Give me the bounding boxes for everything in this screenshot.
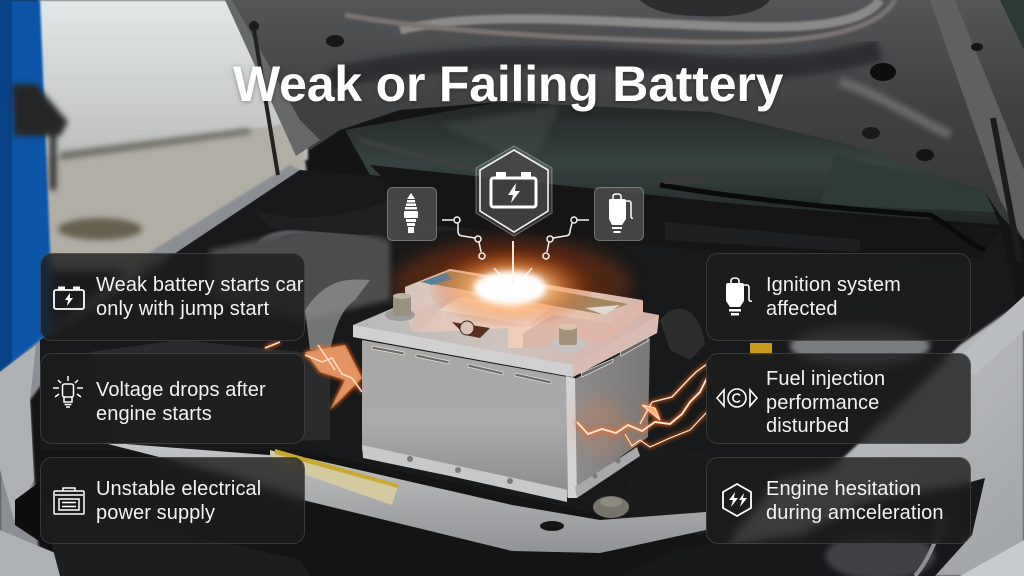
battery terminal: right bbox=[551, 324, 585, 352]
text: unstable electrical power supply bbox=[96, 478, 261, 524]
battery raised top bbox=[405, 269, 643, 348]
battery label bbox=[420, 271, 628, 314]
text: unstable electrical power supply: power supply bbox=[96, 502, 215, 524]
car body: left fender bbox=[0, 165, 320, 576]
text: engine hesitation during amceleration: during amceleration bbox=[766, 502, 944, 524]
text: ignition system affected bbox=[766, 274, 901, 320]
panel: ignition system bbox=[706, 253, 971, 341]
small tile: spark plug bbox=[388, 188, 436, 240]
right electric arcs bbox=[577, 364, 707, 447]
battery terminal: left bbox=[385, 293, 415, 321]
icon: ignition coil bbox=[609, 194, 633, 233]
right side orange heat tint bbox=[572, 397, 628, 453]
open hood underside bbox=[225, 0, 1024, 262]
text: weak battery starts car only with jump start: only with jump start bbox=[96, 298, 269, 320]
car body: right fender and headlight bbox=[620, 296, 1024, 576]
engine bay bbox=[40, 170, 1024, 540]
text: fuel injection performance disturbed bbox=[766, 368, 885, 437]
icon: battery with bolt bbox=[491, 172, 536, 207]
icon: fuel injector symbol bbox=[716, 388, 758, 408]
battery handle plate bbox=[440, 297, 547, 325]
hexagon battery badge bbox=[476, 146, 552, 236]
battery foot notches bbox=[407, 456, 620, 484]
panel: fuel injection bbox=[706, 353, 971, 444]
text: voltage drops after engine starts: engine starts bbox=[96, 402, 212, 424]
text: fuel injection performance disturbed: Fuel injection bbox=[766, 368, 885, 390]
battery bbox=[353, 240, 659, 502]
text: ignition system affected: affected bbox=[766, 298, 838, 320]
cowl and wipers bbox=[360, 140, 1000, 258]
battery base flange bbox=[362, 445, 567, 502]
panel: weak battery starts car bbox=[40, 253, 305, 341]
text: weak battery starts car only with jump start: Weak battery starts car bbox=[96, 274, 304, 296]
text: engine hesitation during amceleration bbox=[766, 478, 944, 524]
text: ignition system affected: Ignition system bbox=[766, 274, 901, 296]
connecting lines and nodes bbox=[442, 217, 589, 259]
icon: spark plug bbox=[404, 193, 418, 233]
text: voltage drops after engine starts bbox=[96, 379, 266, 424]
text: fuel injection performance disturbed: disturbed bbox=[766, 415, 849, 437]
car body: radiator support bar bbox=[40, 442, 706, 576]
panel: voltage drops bbox=[40, 353, 305, 444]
top glow burst on battery bbox=[427, 241, 597, 328]
panel: unstable electrical bbox=[40, 457, 305, 544]
windscreen bbox=[345, 102, 1000, 225]
icon: hexagon with sparks bbox=[722, 483, 752, 517]
title: Weak or Failing Battery bbox=[233, 56, 783, 112]
battery glow halo bbox=[392, 240, 632, 330]
battery lid bbox=[353, 269, 659, 377]
icon: battery box bbox=[53, 487, 85, 515]
left spark lightning bbox=[265, 342, 362, 410]
small tile: ignition coil bbox=[594, 188, 644, 240]
text: fuel injection performance disturbed: performance bbox=[766, 392, 879, 414]
battery front face bbox=[362, 340, 573, 498]
panel: engine hesitation bbox=[706, 457, 971, 544]
garage wall and floor bbox=[0, 0, 320, 380]
icon: ignition coil bbox=[726, 277, 752, 316]
text: engine hesitation during amceleration: Engine hesitation bbox=[766, 478, 921, 500]
icon: battery bbox=[53, 286, 85, 310]
battery vents bbox=[372, 337, 648, 384]
battery right face bbox=[573, 338, 650, 490]
icon: bulb bbox=[53, 376, 83, 408]
text: weak battery starts car only with jump start bbox=[96, 274, 304, 320]
text: voltage drops after engine starts: Voltage drops after bbox=[96, 379, 266, 401]
text: unstable electrical power supply: Unstable electrical bbox=[96, 478, 261, 500]
